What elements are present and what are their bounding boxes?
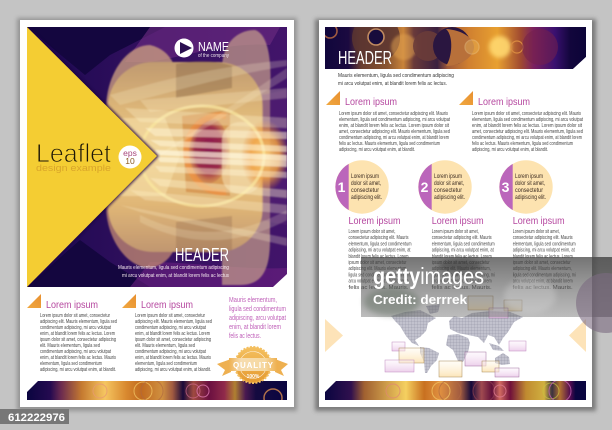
text block: ipsum dolor sit amet, consectetur adipiscing <box>135 337 211 343</box>
quality badge: QUALITY <box>233 361 274 370</box>
text block: condimentum adipiscing, mi arcu volutpat <box>40 325 111 331</box>
heading: Lorem ipsum <box>478 96 530 108</box>
text block: elementum, ligula sed condimentum <box>348 241 412 247</box>
text block <box>135 313 212 373</box>
cover text: mi arcu volutpat enim, at blandit lorem felis ac lectus <box>122 273 229 279</box>
numbered item 3 <box>499 160 576 291</box>
text block <box>40 313 117 373</box>
intro text: Mauris elementum, ligula sed condimentum adipiscing <box>338 73 454 79</box>
text block: consectetur adipiscing elit. Mauris <box>348 235 409 241</box>
text block: ipsum dolor sit amet, consectetur <box>348 260 407 266</box>
numbered item 2: dolor sit amet, <box>434 180 464 187</box>
text block: elementum, ligula sed condimentum <box>40 361 102 367</box>
numbered item 2: 2 <box>421 179 429 195</box>
text block: felis ac lectus. Mauris. <box>432 285 492 291</box>
logo: play icon and name: NAME <box>198 40 229 54</box>
icon: orange triangle <box>459 91 473 105</box>
heading: Lorem ipsum <box>513 215 565 227</box>
text block: adipiscing, mi arcu volutpat enim, at blandit. <box>40 367 116 373</box>
quality badge <box>217 347 288 383</box>
text block: enim, at blandit lorem felis ac lectus. Lorem ipsum dolor sit <box>472 123 583 129</box>
column 2 <box>122 294 212 373</box>
numbered item 2: consectetur <box>434 187 463 194</box>
icon: orange triangle <box>122 294 136 308</box>
numbered item 2 <box>418 160 495 291</box>
text block: Lorem ipsum dolor sit amet, <box>513 229 560 235</box>
header band <box>325 27 586 69</box>
pink text block <box>229 295 286 340</box>
text block <box>339 111 450 153</box>
text block: elementum, ligula sed condimentum <box>432 241 495 247</box>
text block <box>348 229 412 291</box>
column 1 <box>27 294 117 373</box>
text block: enim, at blandit lorem felis ac lectus. Mauris <box>40 355 116 361</box>
cover artwork <box>27 25 289 289</box>
text block: blandit lorem felis ac lectus. Lorem <box>432 254 492 260</box>
text block: felis ac lectus. Mauris. <box>513 285 573 291</box>
text block <box>432 229 495 291</box>
text block: elementum, ligula sed condimentum <box>135 361 197 367</box>
text block: consectetur adipiscing elit. Mauris <box>513 235 573 241</box>
text block <box>513 229 576 291</box>
cover header: HEADER <box>175 245 229 265</box>
text block: adipiscing, mi arcu volutpat enim, at <box>432 248 494 254</box>
text block: amet, consectetur adipiscing elit. Mauris elementum, ligula sed <box>339 129 450 135</box>
logo: play icon and name: of the company <box>198 53 229 59</box>
numbered item 2: adipiscing elit. <box>434 194 465 201</box>
text block: Lorem ipsum dolor sit amet, <box>432 229 479 235</box>
text block: elit. Mauris elementum, ligula sed <box>40 343 100 349</box>
icon: orange triangle <box>27 294 41 308</box>
quality badge: 100% <box>247 374 260 380</box>
watermark logo: gettyimages <box>373 263 484 289</box>
numbered item 1: adipiscing elit. <box>351 194 382 201</box>
text block: Lorem ipsum dolor sit amet, consectetur adipiscing elit. Mauris <box>472 111 581 117</box>
text block: condimentum adipiscing, mi arcu volutpat <box>135 349 206 355</box>
map callouts <box>385 296 526 377</box>
text block: Lorem ipsum dolor sit amet, <box>348 229 396 235</box>
text block: condimentum adipiscing, mi arcu volutpat <box>135 325 206 331</box>
text block: amet, consectetur adipiscing elit. Mauris elementum, ligula sed <box>472 129 583 135</box>
text block: felis ac lectus. Mauris elementum, ligula sed condimentum <box>339 141 440 147</box>
watermark credit: Credit: derrrek <box>373 293 467 307</box>
heading: Lorem ipsum <box>46 299 98 311</box>
text block: ligula sed condimentum adipiscing, mi <box>432 272 495 278</box>
text block: adipiscing elit. Mauris elementum, ligula sed <box>135 319 212 325</box>
text block: adipiscing, mi arcu volutpat enim, at blandit. <box>339 147 415 153</box>
panel: left page <box>20 20 294 407</box>
text block: enim, at blandit lorem felis ac lectus. Mauris <box>135 355 211 361</box>
top right column <box>459 91 583 153</box>
text block: consectetur adipiscing elit. Mauris <box>432 235 492 241</box>
text block: adipiscing, mi arcu volutpat enim, at <box>513 248 575 254</box>
text block: adipiscing elit. Mauris elementum, <box>513 266 572 272</box>
heading: Lorem ipsum <box>348 215 401 227</box>
bottom band <box>325 381 586 400</box>
numbered item 3: adipiscing elit. <box>515 194 546 201</box>
text block: ligula sed condimentum adipiscing, mi <box>348 272 412 278</box>
text block: felis ac lectus. Mauris. <box>348 285 408 291</box>
bottom band <box>27 381 287 400</box>
yellow triangle <box>27 27 157 287</box>
heading: Lorem ipsum <box>345 96 397 108</box>
numbered item 3: dolor sit amet, <box>515 180 545 187</box>
text block <box>472 111 583 153</box>
heading: Lorem ipsum <box>141 299 193 311</box>
logo: play icon and name <box>174 38 229 59</box>
eps badge: eps <box>123 148 137 158</box>
text block: adipiscing elit. Mauris elementum, <box>432 266 491 272</box>
text block: elementum, ligula sed condimentum <box>513 241 576 247</box>
panel: right page <box>319 14 592 407</box>
text block: adipiscing, mi arcu volutpat enim, at blandit. <box>472 147 548 153</box>
numbered item 1 <box>335 160 412 291</box>
text block: condimentum adipiscing, mi arcu volutpat enim, at blandit lorem <box>339 135 449 141</box>
text block: blandit lorem felis ac lectus. Lorem <box>348 254 408 260</box>
eps badge: 10 <box>125 156 135 166</box>
text block: condimentum adipiscing, mi arcu volutpat <box>40 349 111 355</box>
eps badge <box>118 146 142 168</box>
arrow: right cream triangle <box>569 319 586 352</box>
pink text block: enim, at blandit lorem <box>229 322 281 331</box>
subtitle: design example <box>36 163 111 174</box>
pink text block: Mauris elementum, <box>229 295 277 304</box>
numbered item 2: Lorem ipsum <box>434 173 462 180</box>
text block: Lorem ipsum dolor sit amet, consectetur <box>40 313 110 319</box>
text block: condimentum adipiscing, mi arcu volutpat enim, at blandit lorem <box>472 135 582 141</box>
world map <box>391 304 523 373</box>
numbered item 3: consectetur <box>515 187 544 194</box>
intro text <box>338 73 454 87</box>
heading: Lorem ipsum <box>432 215 484 227</box>
watermark banner <box>361 257 612 333</box>
text block: ligula sed condimentum adipiscing, mi <box>513 272 576 278</box>
text block: adipiscing, mi arcu volutpat enim, at blandit. <box>135 367 211 373</box>
text block: adipiscing, mi arcu volutpat enim, at <box>348 248 411 254</box>
intro text: mi arcu volutpat enim, at blandit lorem felis ac lectus. <box>338 81 447 87</box>
text block: enim, at blandit lorem felis ac lectus. Lorem <box>40 331 115 337</box>
icon: orange triangle <box>326 91 340 105</box>
numbered item 3: 3 <box>502 179 510 195</box>
text block: ipsum dolor sit amet, consectetur adipiscing <box>40 337 116 343</box>
text block: blandit lorem felis ac lectus. Lorem <box>513 254 573 260</box>
arrow: left cream triangle <box>325 319 343 352</box>
top left column <box>326 91 450 153</box>
text block: enim, at blandit lorem felis ac lectus. Lorem <box>135 331 210 337</box>
numbered item 3: Lorem ipsum <box>515 173 543 180</box>
text block: adipiscing elit. Mauris elementum, ligula sed <box>40 319 117 325</box>
numbered item 1: 1 <box>338 179 346 195</box>
text block: ipsum dolor sit amet, consectetur <box>513 260 571 266</box>
numbered item 1: consectetur <box>351 187 380 194</box>
pink text block: adipiscing, arcu volutpat <box>229 313 286 322</box>
text block: felis ac lectus. Mauris elementum, ligula sed condimentum <box>472 141 573 147</box>
text block: arcu volutpat enim, at blandit lorem <box>513 279 573 285</box>
text block: elementum, ligula sed condimentum adipiscing, mi arcu volutpat <box>339 117 450 123</box>
cover text <box>118 265 229 279</box>
heading: HEADER: HEADER <box>338 48 392 68</box>
text block: arcu volutpat enim, at blandit lorem <box>348 279 408 285</box>
numbered item 1: dolor sit amet, <box>351 180 381 187</box>
cover text: Mauris elementum, ligula sed condimentum adipiscing <box>118 265 229 271</box>
image id tag <box>0 409 69 424</box>
image id tag: 612222976 <box>8 412 65 424</box>
text block: ipsum dolor sit amet, consectetur <box>432 260 490 266</box>
title: Leaflet: Leaflet <box>36 138 112 168</box>
text block: enim, at blandit lorem felis ac lectus. Lorem ipsum dolor sit <box>339 123 450 129</box>
text block: elementum, ligula sed condimentum adipiscing, mi arcu volutpat <box>472 117 583 123</box>
pink text block: ligula sed condimentum <box>229 304 286 313</box>
text block: Lorem ipsum dolor sit amet, consectetur <box>135 313 205 319</box>
text block: elit. Mauris elementum, ligula sed <box>135 343 195 349</box>
numbered item 1: Lorem ipsum <box>351 173 379 180</box>
text block: adipiscing elit. Mauris elementum, <box>348 266 408 272</box>
pink text block: felis ac lectus. <box>229 331 261 340</box>
text block: arcu volutpat enim, at blandit lorem <box>432 279 492 285</box>
text block: Lorem ipsum dolor sit amet, consectetur adipiscing elit. Mauris <box>339 111 448 117</box>
